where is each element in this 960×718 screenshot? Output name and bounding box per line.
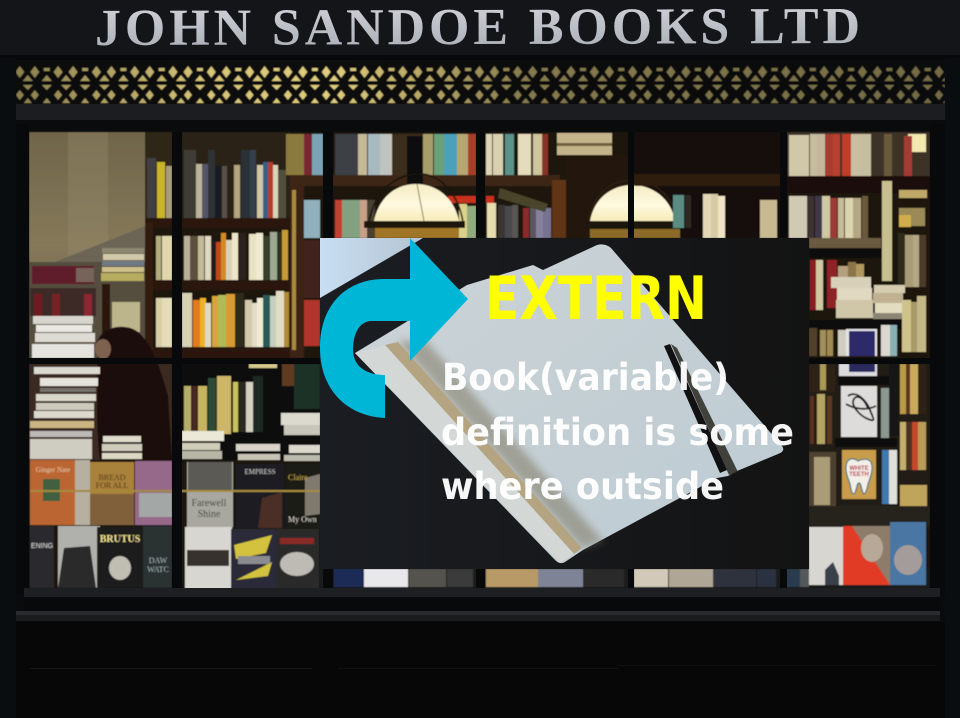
body text: where outside bbox=[441, 465, 724, 508]
window mullions bbox=[16, 124, 945, 594]
lattice frieze bbox=[16, 60, 945, 104]
display books: BREAD bbox=[98, 473, 126, 482]
stacked white books bbox=[30, 367, 142, 459]
white book stack bbox=[831, 277, 926, 352]
bottom strip books bbox=[320, 522, 930, 588]
tooth book: WHITE bbox=[849, 466, 869, 472]
pendant lamp right bbox=[586, 180, 680, 238]
back wall bbox=[29, 132, 290, 360]
lower right books bbox=[809, 364, 930, 529]
curved arrow icon bbox=[320, 238, 468, 418]
person bbox=[95, 327, 172, 460]
display books: Ginger Nate bbox=[36, 466, 70, 474]
notebook spine bbox=[398, 340, 604, 548]
left shelf books bbox=[145, 150, 290, 358]
upper centre books bbox=[286, 133, 630, 358]
light sheet corner bbox=[320, 238, 423, 298]
interior base bbox=[29, 132, 930, 588]
body text bbox=[441, 356, 794, 508]
small left shelf and boxes bbox=[30, 248, 144, 358]
notebook bbox=[355, 244, 783, 563]
grey display books: EMPRESS bbox=[244, 468, 276, 476]
grey display books bbox=[185, 462, 320, 589]
right display books bbox=[809, 522, 926, 585]
tooth book bbox=[842, 450, 876, 499]
display books bbox=[30, 460, 172, 588]
lower left stacks and person bbox=[29, 327, 172, 588]
pen bbox=[671, 344, 738, 475]
panel: extern callout bbox=[320, 238, 809, 569]
grey display books: My Own bbox=[288, 515, 317, 524]
window sill bbox=[16, 588, 940, 621]
grey display books: Claire bbox=[288, 473, 308, 482]
brass rail bbox=[30, 490, 320, 492]
display books: BRUTUS bbox=[100, 534, 141, 545]
scribble book bbox=[841, 386, 877, 437]
grey display books: Farewell bbox=[192, 498, 227, 509]
grey display books: Shine bbox=[198, 509, 221, 520]
display books: ENING bbox=[31, 543, 53, 550]
heading: EXTERN: EXTERN bbox=[485, 264, 707, 334]
sign board bbox=[0, 0, 960, 59]
lower wall panels bbox=[16, 622, 945, 718]
tooth book: TEETH bbox=[849, 472, 869, 478]
pendant lamp left bbox=[364, 136, 465, 228]
lower middle-left books bbox=[30, 364, 323, 589]
upper right books bbox=[634, 132, 930, 287]
display books: DAW bbox=[149, 556, 168, 565]
display books: WATC bbox=[147, 565, 169, 574]
panel background bbox=[320, 238, 809, 569]
shop interior bbox=[29, 132, 930, 589]
body text: definition is some bbox=[441, 411, 794, 454]
blue book bbox=[846, 329, 877, 356]
right shelf books bbox=[809, 238, 926, 356]
display books: FOR ALL bbox=[96, 481, 128, 490]
upper middle-right pane bbox=[634, 132, 780, 238]
body text: Book(variable) bbox=[442, 356, 729, 399]
